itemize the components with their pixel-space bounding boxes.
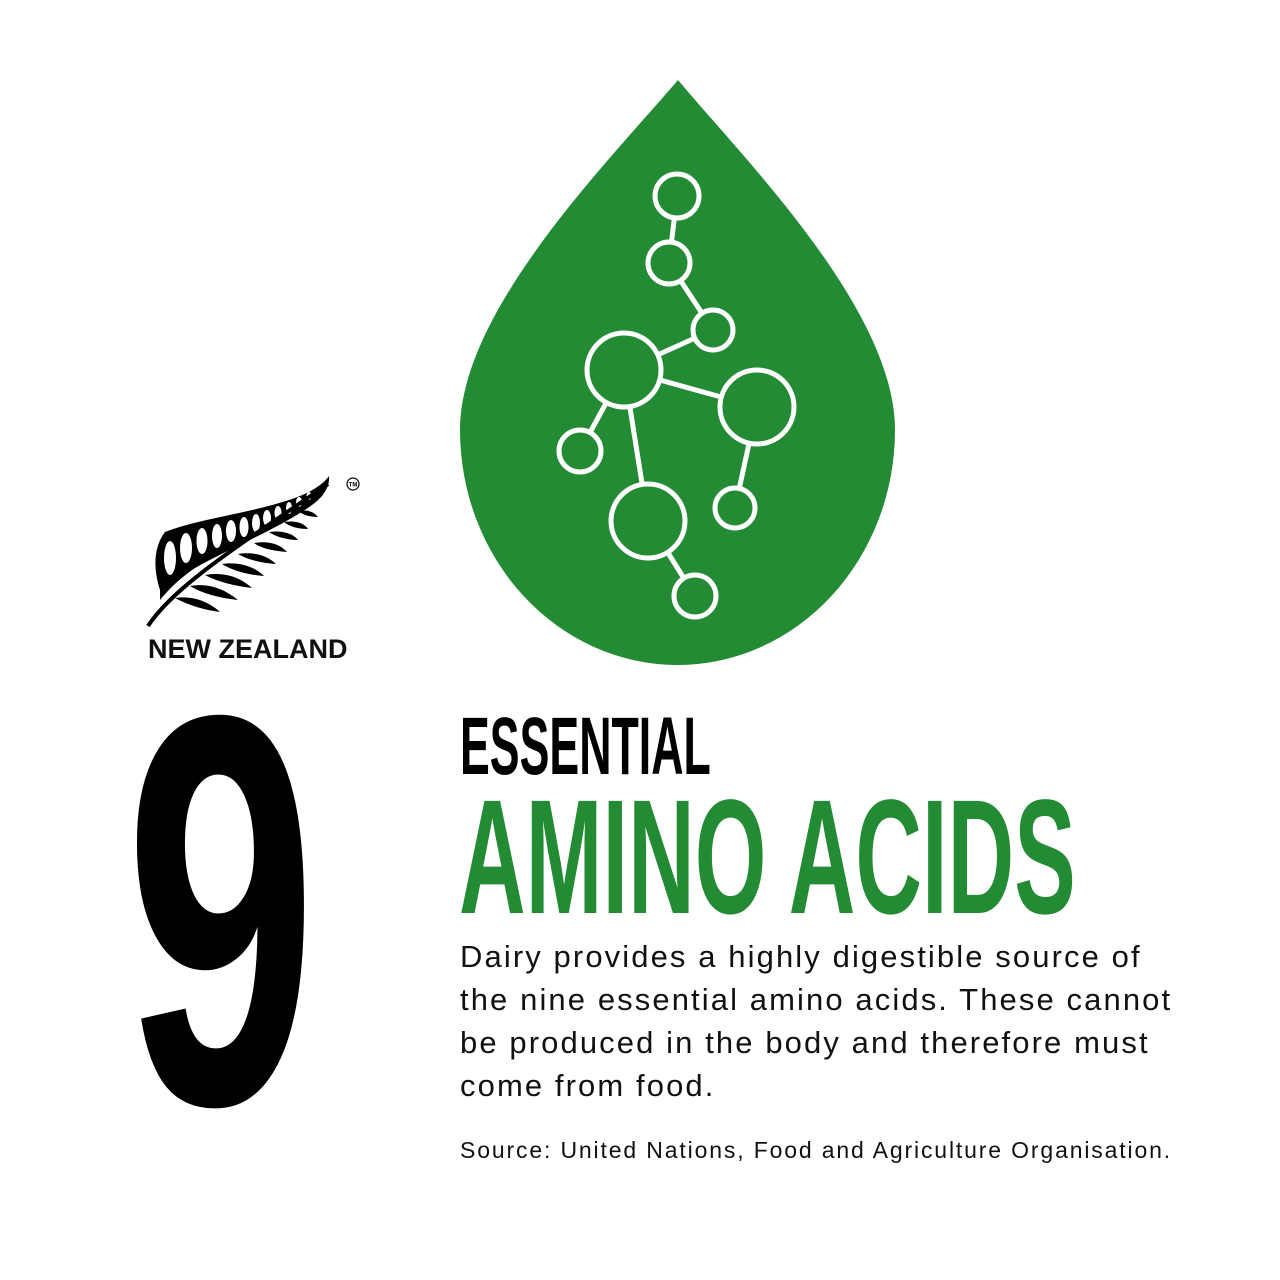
body text: be produced in the body and therefore must <box>460 1025 1150 1060</box>
logo text: NEW ZEALAND <box>148 634 347 664</box>
source text: Source: United Nations, Food and Agriculture Organisation. <box>460 1137 1172 1163</box>
trademark <box>347 478 359 490</box>
body text: come from food. <box>460 1068 715 1103</box>
icon: molecule <box>559 174 794 617</box>
lower leaflets <box>175 510 318 612</box>
big number 9: 9 <box>125 600 317 1221</box>
green drop <box>460 80 895 665</box>
logo: New Zealand fern: TM <box>349 482 357 488</box>
body text: the nine essential amino acids. These cannot <box>460 982 1172 1017</box>
stem <box>148 484 328 626</box>
logo: New Zealand fern <box>146 476 360 664</box>
body text: Dairy provides a highly digestible source of <box>460 939 1142 974</box>
drop with molecule <box>460 80 895 665</box>
fern upper frond <box>155 476 329 600</box>
heading: essential: ESSENTIAL <box>460 701 711 792</box>
heading: amino acids: AMINO ACIDS <box>459 765 1076 948</box>
body text <box>460 939 1172 1103</box>
